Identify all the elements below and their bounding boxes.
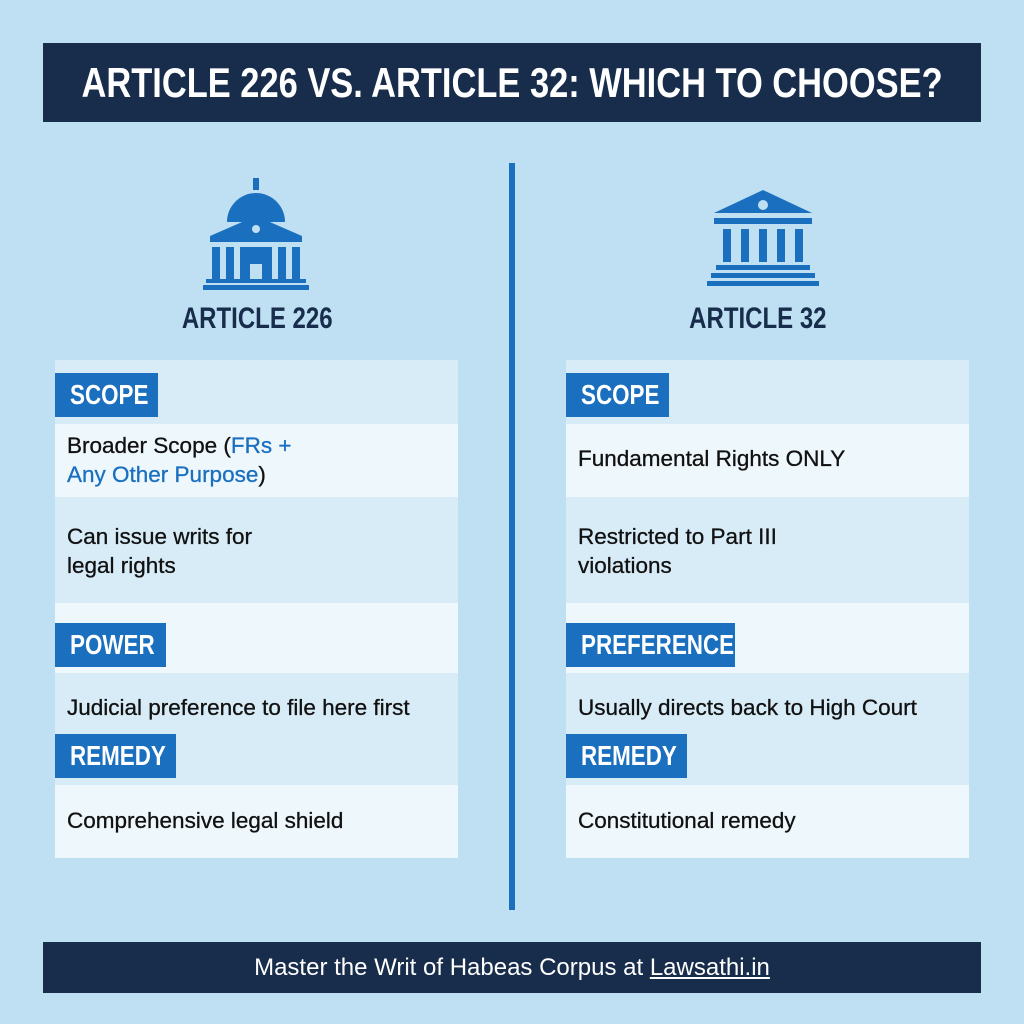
- row: comprehensive: [55, 785, 458, 858]
- label: scope: SCOPE: [581, 379, 659, 410]
- row: broader scope: Any Other Purpose): [67, 462, 266, 487]
- heading: article 226: ARTICLE 226: [182, 302, 332, 335]
- row: broader scope: [55, 424, 458, 497]
- label: power: [55, 623, 166, 667]
- label: scope: [55, 373, 158, 417]
- row: part III: violations: [578, 553, 672, 578]
- icon: supreme court building: [707, 190, 819, 286]
- row: legal rights: Can issue writs for: [67, 524, 252, 549]
- label: preference: PREFERENCE: [581, 629, 734, 660]
- label: scope: [566, 373, 669, 417]
- panel: article 226: [55, 360, 458, 858]
- title: [43, 43, 981, 122]
- row: judicial preference: [55, 673, 458, 785]
- label: preference: [566, 623, 735, 667]
- row: constitutional remedy: [566, 785, 969, 858]
- footer: Lawsathi.in: [650, 954, 770, 980]
- row: legal rights: [55, 497, 458, 603]
- label: power: POWER: [70, 629, 155, 660]
- label: remedy: [566, 734, 687, 778]
- icon: high court building: [203, 178, 309, 290]
- footer: [43, 942, 981, 993]
- row: directs back: [566, 673, 969, 785]
- panel: article 32: [566, 360, 969, 858]
- row: directs back: Usually directs back to High Court: [578, 695, 917, 720]
- label: remedy: REMEDY: [581, 740, 677, 771]
- row: constitutional remedy: Constitutional remedy: [578, 808, 796, 833]
- row: part III: [566, 497, 969, 603]
- row: fundamental rights: Fundamental Rights ONLY: [578, 446, 845, 471]
- footer: Master the Writ of Habeas Corpus at: [254, 954, 643, 980]
- heading: article 32: ARTICLE 32: [689, 302, 827, 335]
- label: scope: SCOPE: [70, 379, 148, 410]
- row: legal rights: legal rights: [67, 553, 176, 578]
- row: judicial preference: Judicial preference to file here first: [67, 695, 410, 720]
- row: part III: Restricted to Part III: [578, 524, 777, 549]
- title: ARTICLE 226 VS. ARTICLE 32: WHICH TO CHOOSE?: [81, 58, 943, 106]
- row: broader scope: Broader Scope (FRs +: [67, 433, 291, 458]
- row: comprehensive: Comprehensive legal shield: [67, 808, 343, 833]
- divider: [509, 163, 515, 910]
- row: fundamental rights: [566, 424, 969, 497]
- label: remedy: [55, 734, 176, 778]
- label: remedy: REMEDY: [70, 740, 166, 771]
